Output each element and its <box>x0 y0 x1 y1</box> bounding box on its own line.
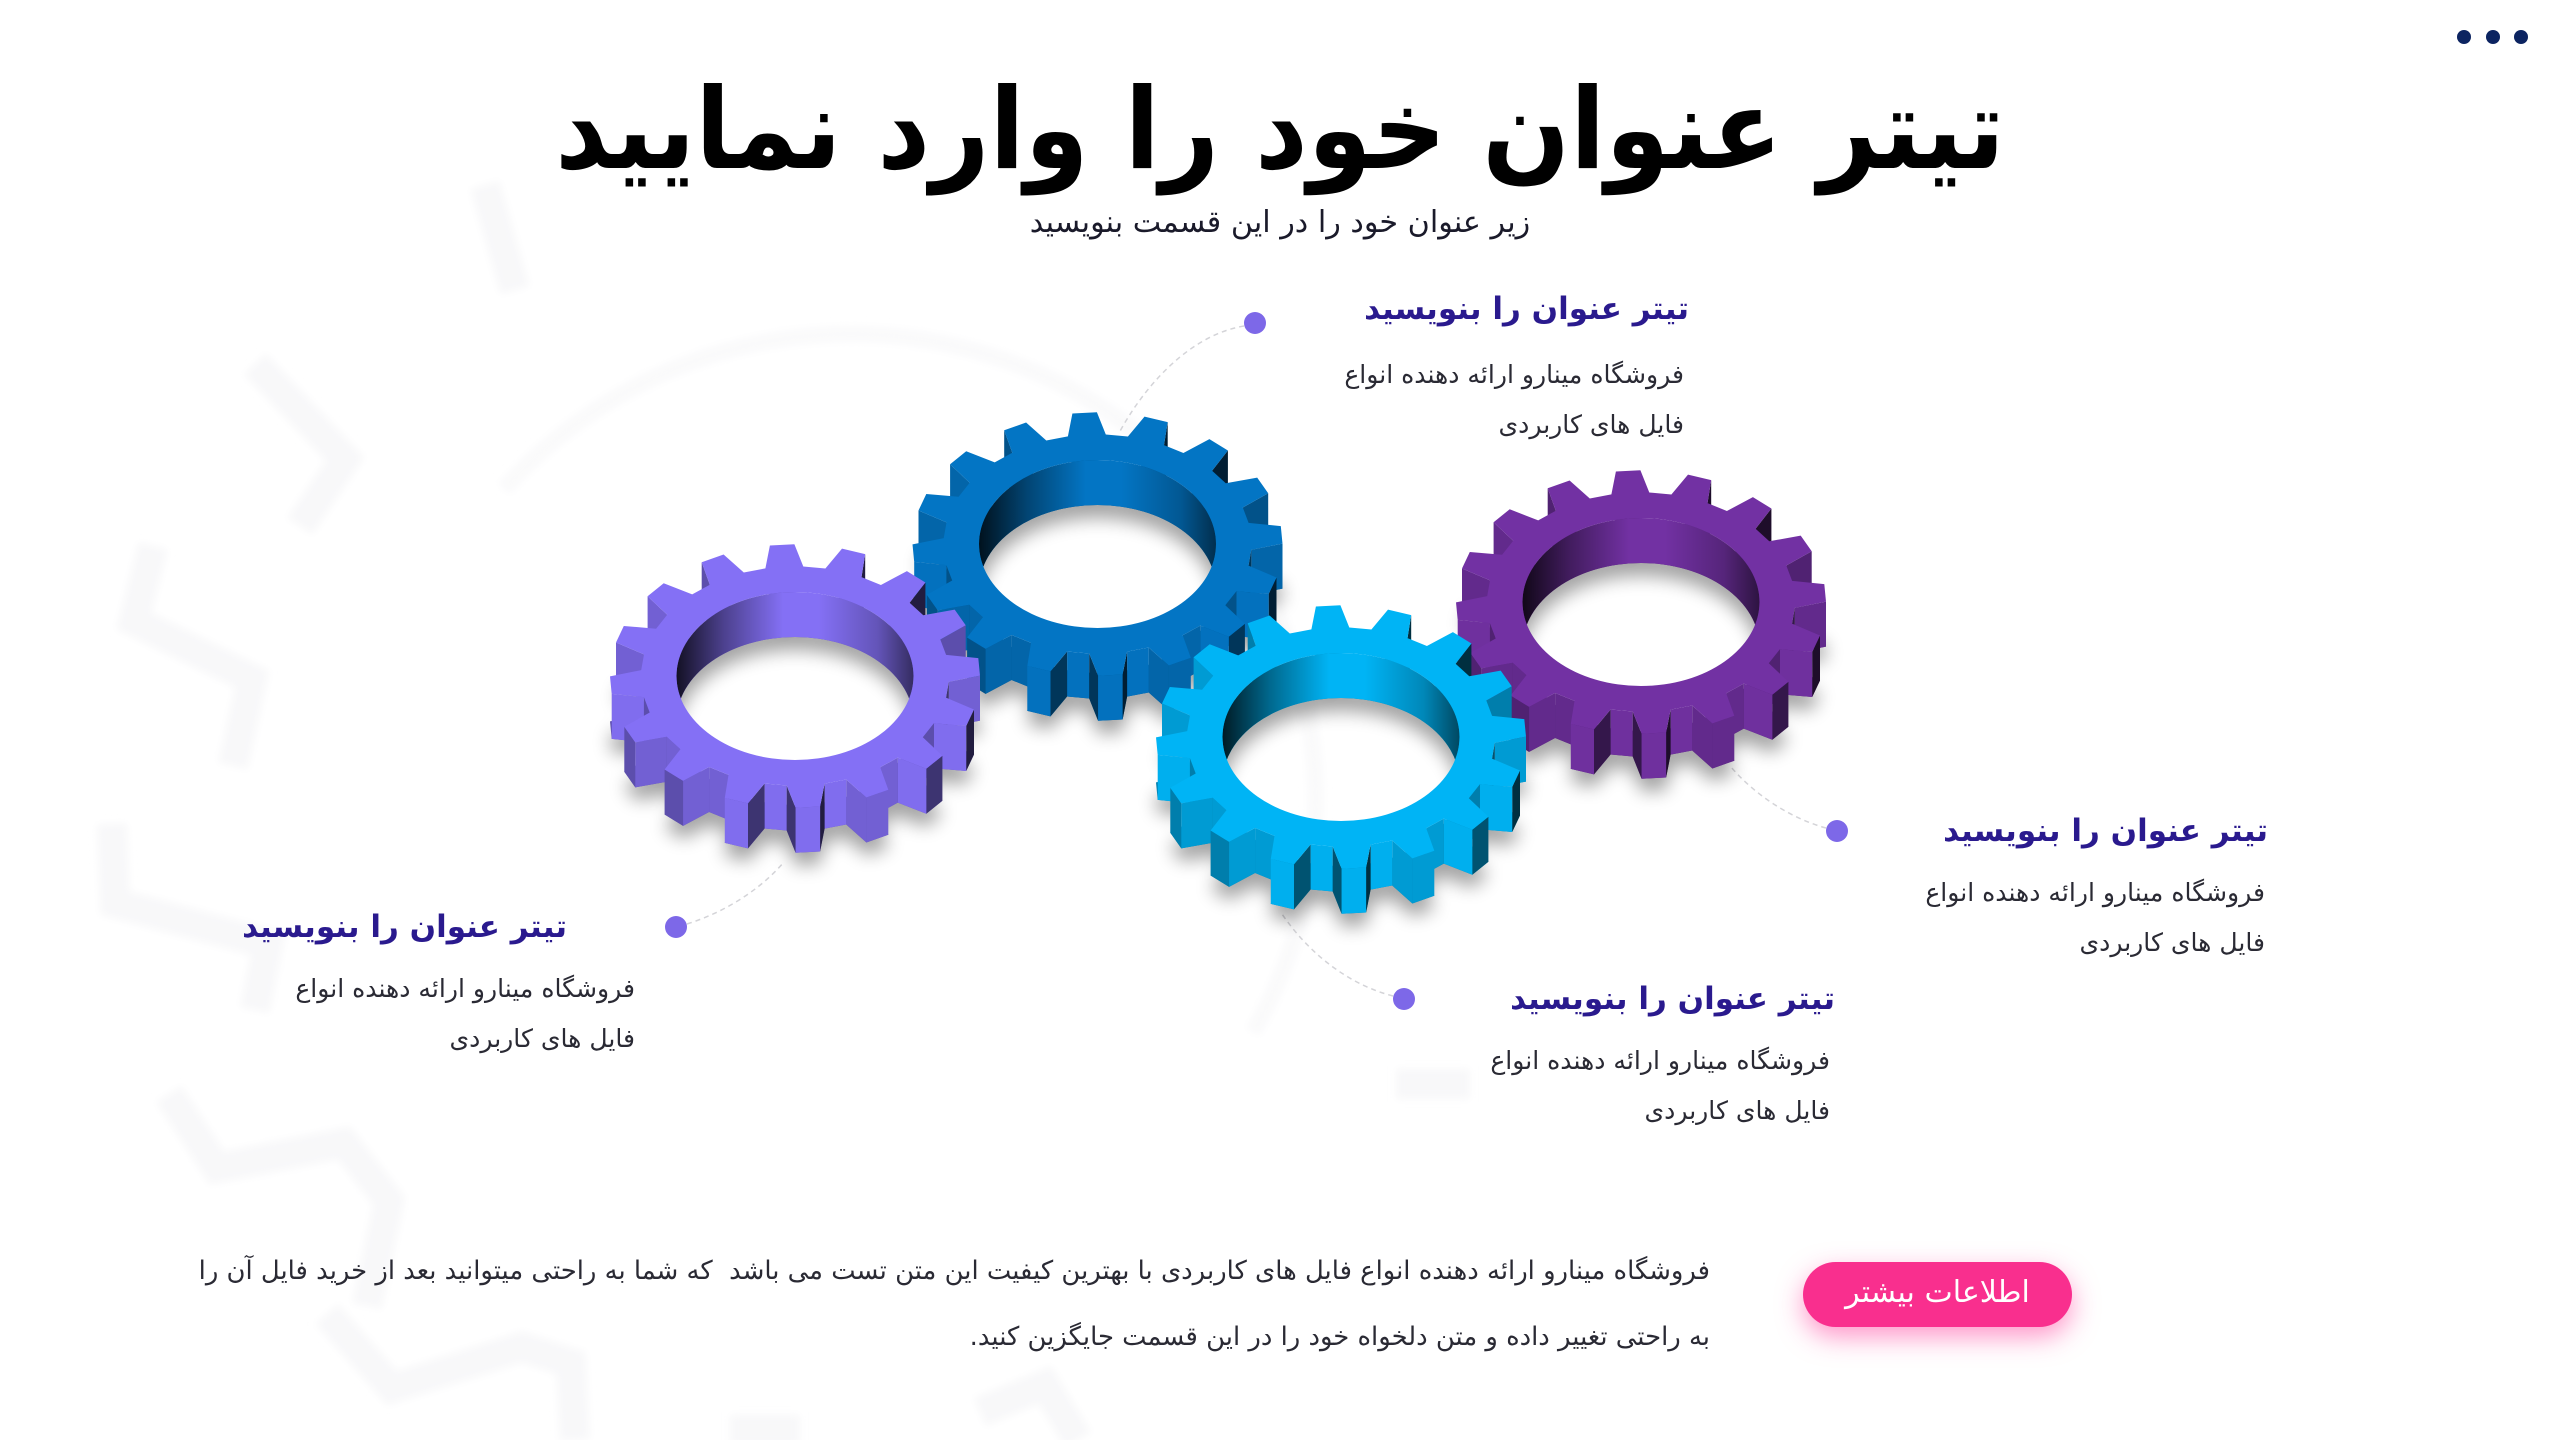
callout: left gear <box>242 909 635 1054</box>
callout body: فایل های کاربردی <box>1645 1096 1830 1125</box>
button: more info <box>1803 1262 2072 1327</box>
callout: bottom gear <box>1490 981 1835 1126</box>
description paragraph: فروشگاه مینارو ارائه دهنده انواع فایل های کاربردی با بهترین کیفیت این متن تست می باشد که شما به راحتی میتوانید بعد از خرید فایل آن را <box>199 1256 1710 1286</box>
description paragraph: به راحتی تغییر داده و متن دلخواه خود را در این قسمت جایگزین کنید. <box>970 1322 1710 1352</box>
callout body <box>1490 1046 1830 1126</box>
callout body: فروشگاه مینارو ارائه دهنده انواع <box>1490 1046 1830 1075</box>
callout body: فایل های کاربردی <box>1499 410 1684 439</box>
dot: left callout <box>665 916 687 938</box>
callout body: فروشگاه مینارو ارائه دهنده انواع <box>295 974 635 1003</box>
connector: right gear callout <box>1731 767 1826 828</box>
callout heading: تیتر عنوان را بنویسید <box>1364 291 1689 327</box>
gear: violet <box>595 476 995 876</box>
connector: bottom gear callout <box>1282 914 1393 996</box>
connector: left gear callout <box>687 862 784 924</box>
dot: bottom callout <box>1393 988 1415 1010</box>
callout: top gear <box>1344 291 1689 440</box>
callout heading: تیتر عنوان را بنویسید <box>242 909 567 945</box>
button: more info: اطلاعات بیشتر <box>1845 1275 2030 1310</box>
icon: menu dots <box>2457 30 2528 44</box>
callout body: فروشگاه مینارو ارائه دهنده انواع <box>1344 360 1684 389</box>
connector: top gear callout <box>1119 326 1244 433</box>
title: تیتر عنوان خود را وارد نمایید <box>555 65 2005 195</box>
callout heading: تیتر عنوان را بنویسید <box>1510 981 1835 1017</box>
callout body <box>1344 360 1684 440</box>
subtitle: زیر عنوان خود را در این قسمت بنویسید <box>1030 205 1530 240</box>
gear: purple <box>1441 402 1841 802</box>
callout body: فایل های کاربردی <box>2080 928 2265 957</box>
callout body: فروشگاه مینارو ارائه دهنده انواع <box>1925 878 2265 907</box>
callout body <box>1925 878 2265 958</box>
callout body <box>295 974 635 1054</box>
dot: top callout <box>1244 312 1266 334</box>
gear: cyan <box>1141 537 1541 937</box>
callout heading: تیتر عنوان را بنویسید <box>1943 813 2268 849</box>
description paragraph <box>199 1254 1710 1352</box>
callout: right gear <box>1925 813 2268 958</box>
background watermark gear <box>112 185 1470 1440</box>
dot: right callout <box>1826 820 1848 842</box>
gear: blue <box>898 344 1298 744</box>
callout body: فایل های کاربردی <box>450 1024 635 1053</box>
